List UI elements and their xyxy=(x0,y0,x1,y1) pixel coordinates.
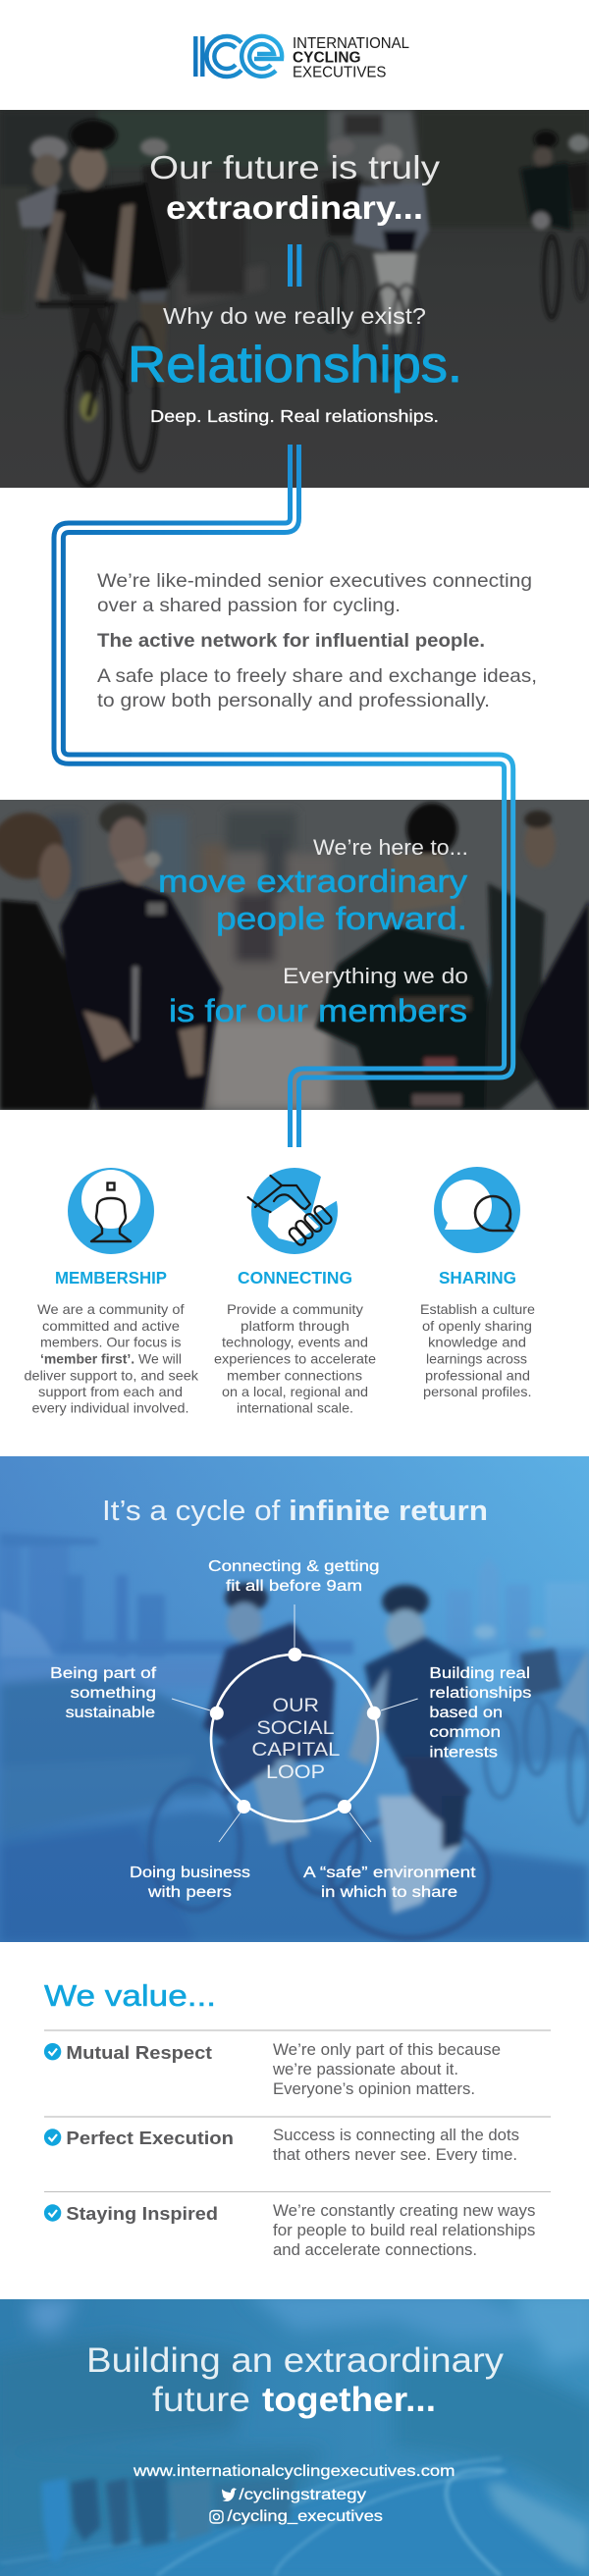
right rider xyxy=(331,1816,488,1938)
hero question: Why do we really exist? xyxy=(163,303,426,329)
panel: footer photo xyxy=(0,2291,589,2576)
description: support from each and xyxy=(38,1384,183,1399)
section: about text: The active network for influential people. xyxy=(97,630,485,652)
logo mark: ICE xyxy=(195,36,282,77)
description: international scale. xyxy=(237,1399,353,1415)
closing heading: together... xyxy=(262,2380,436,2419)
hero heading xyxy=(149,149,441,226)
hero keyword: Relationships: Relationships. xyxy=(128,337,462,394)
loop centre label xyxy=(251,1695,341,1783)
closing heading: Building an extraordinary xyxy=(86,2340,504,2380)
panel: hero photo xyxy=(0,110,589,488)
description xyxy=(24,1301,199,1415)
description: Establish a culture xyxy=(420,1301,535,1317)
value: staying inspired: We’re constantly creating new ways xyxy=(273,2202,535,2220)
description: professional and xyxy=(425,1368,530,1384)
lead rider xyxy=(54,183,169,294)
section: about text: over a shared passion for cycling. xyxy=(97,595,401,616)
contact: twitter: /cyclingstrategy xyxy=(239,2487,366,2503)
description: deliver support to, and seek xyxy=(24,1368,199,1384)
hero tagline: Deep. Lasting. Real relationships. xyxy=(150,406,439,426)
rules xyxy=(44,2029,551,2192)
logo wordmark: INTERNATIONAL xyxy=(293,35,409,52)
section: values xyxy=(44,1978,551,2259)
value: perfect execution xyxy=(44,2127,519,2164)
column: connecting xyxy=(214,1168,376,1415)
value: mutual respect xyxy=(44,2041,501,2098)
label: real relationships: interests xyxy=(429,1745,498,1761)
icon: person xyxy=(68,1168,154,1254)
description: Provide a community xyxy=(227,1301,363,1317)
label: real relationships: Building real xyxy=(429,1665,530,1682)
check icon xyxy=(44,2204,61,2222)
connector lines xyxy=(172,1604,418,1842)
description: knowledge and xyxy=(428,1335,526,1350)
contact: website: www.internationalcyclingexecutives.com xyxy=(133,2463,455,2480)
closing heading: future xyxy=(152,2380,250,2419)
description: We are a community of xyxy=(37,1301,185,1317)
value: staying inspired xyxy=(44,2202,535,2259)
value: staying inspired: for people to build real relationships xyxy=(273,2222,535,2239)
label: safe environment: in which to share xyxy=(321,1884,457,1901)
right riders xyxy=(534,131,558,148)
label: business: with peers xyxy=(147,1884,232,1901)
icon: speech bubbles xyxy=(434,1167,520,1253)
description xyxy=(420,1301,535,1399)
check icon xyxy=(44,2129,61,2146)
connector: top double bar xyxy=(288,244,301,287)
value: perfect execution: Perfect Execution xyxy=(66,2128,234,2148)
section: about text: to grow both personally and professionally. xyxy=(97,690,490,711)
label: safe environment xyxy=(303,1865,476,1901)
description: platform through xyxy=(241,1318,349,1334)
description: personal profiles. xyxy=(423,1384,532,1399)
label: real relationships: common xyxy=(429,1724,501,1741)
heading: CONNECTING xyxy=(238,1268,352,1288)
loop centre label: CAPITAL xyxy=(251,1739,341,1761)
hero heading: Our future is truly xyxy=(149,149,441,185)
logo wordmark xyxy=(293,35,409,80)
contact: instagram: /cycling_executives xyxy=(228,2508,383,2525)
members heading: We’re here to... xyxy=(313,835,468,860)
column: membership xyxy=(24,1168,199,1415)
label: real relationships: relationships xyxy=(429,1685,532,1702)
members heading: Everything we do xyxy=(283,964,468,988)
hero heading: extraordinary... xyxy=(166,189,423,226)
connector: double flowing line xyxy=(54,445,513,1147)
check icon xyxy=(44,2043,61,2060)
loop centre label: SOCIAL xyxy=(256,1717,335,1739)
description: technology, events and xyxy=(222,1335,368,1350)
logo wordmark: EXECUTIVES xyxy=(293,65,387,80)
members heading: is for our members xyxy=(169,993,467,1028)
label: business xyxy=(130,1865,250,1901)
icon: instagram xyxy=(210,2510,223,2523)
description: on a local, regional and xyxy=(222,1384,368,1399)
loop centre label: OUR xyxy=(273,1695,319,1716)
middle riders xyxy=(329,138,354,156)
description: of openly sharing xyxy=(422,1318,532,1334)
label: real relationships: based on xyxy=(429,1705,503,1721)
icon: twitter bird xyxy=(222,2488,237,2501)
heading: MEMBERSHIP xyxy=(55,1268,167,1288)
value: mutual respect: we’re passionate about it. xyxy=(272,2061,458,2078)
description: every individual involved. xyxy=(31,1399,189,1415)
values heading: We value... xyxy=(44,1978,216,2013)
diagram: social capital loop xyxy=(50,1558,532,1901)
loop ring xyxy=(211,1655,378,1821)
panel: members photo xyxy=(0,800,589,1110)
value: mutual respect: We’re only part of this because xyxy=(273,2041,501,2059)
value: mutual respect: Everyone’s opinion matters. xyxy=(273,2080,475,2098)
value: staying inspired: Staying Inspired xyxy=(66,2203,218,2224)
rider 2 xyxy=(30,136,68,162)
section: about text: We’re like-minded senior executives connecting xyxy=(97,570,532,592)
description: committed and active xyxy=(42,1318,180,1334)
section: about text: A safe place to freely share and exchange ideas, xyxy=(97,665,537,687)
label: business: Doing business xyxy=(130,1865,250,1881)
description xyxy=(214,1301,376,1415)
logo xyxy=(195,35,409,80)
label: connecting: fit all before 9am xyxy=(226,1578,362,1595)
value: staying inspired: and accelerate connections. xyxy=(273,2241,477,2259)
node dots xyxy=(210,1648,381,1814)
value: mutual respect: Mutual Respect xyxy=(66,2042,212,2063)
section: about text xyxy=(97,570,537,711)
label: connecting xyxy=(208,1558,379,1595)
value: perfect execution: that others never see. Every time. xyxy=(273,2146,517,2164)
icon: handshake xyxy=(248,1168,344,1254)
value: perfect execution: Success is connecting all the dots xyxy=(273,2127,519,2144)
label: sustainable: Being part of xyxy=(50,1665,157,1682)
label: real relationships xyxy=(429,1665,532,1761)
description: experiences to accelerate xyxy=(214,1350,376,1366)
logo wordmark: CYCLING xyxy=(293,49,361,67)
description: members. Our focus is xyxy=(40,1335,181,1350)
members heading xyxy=(158,835,468,1028)
heading: SHARING xyxy=(439,1268,516,1288)
label: sustainable xyxy=(50,1665,157,1721)
closing heading xyxy=(86,2340,504,2419)
rider 3 xyxy=(140,138,168,156)
small riders xyxy=(474,1625,496,1639)
loop centre label: LOOP xyxy=(266,1761,325,1783)
label: safe environment: A “safe” environment xyxy=(303,1865,476,1881)
description: learnings across xyxy=(426,1350,527,1366)
label: sustainable: something xyxy=(71,1685,156,1702)
label: connecting: Connecting & getting xyxy=(208,1558,379,1575)
description: member connections xyxy=(227,1368,362,1384)
members heading: people forward. xyxy=(216,901,467,936)
label: sustainable: sustainable xyxy=(66,1705,155,1721)
column: sharing xyxy=(420,1167,535,1399)
description: ‘member first’. We will xyxy=(40,1350,182,1366)
members heading: move extraordinary xyxy=(158,864,467,899)
left rider xyxy=(150,1780,241,1910)
loop section heading: It’s a cycle of infinite return xyxy=(102,1496,488,1527)
panel: social capital photo xyxy=(0,1456,589,1942)
